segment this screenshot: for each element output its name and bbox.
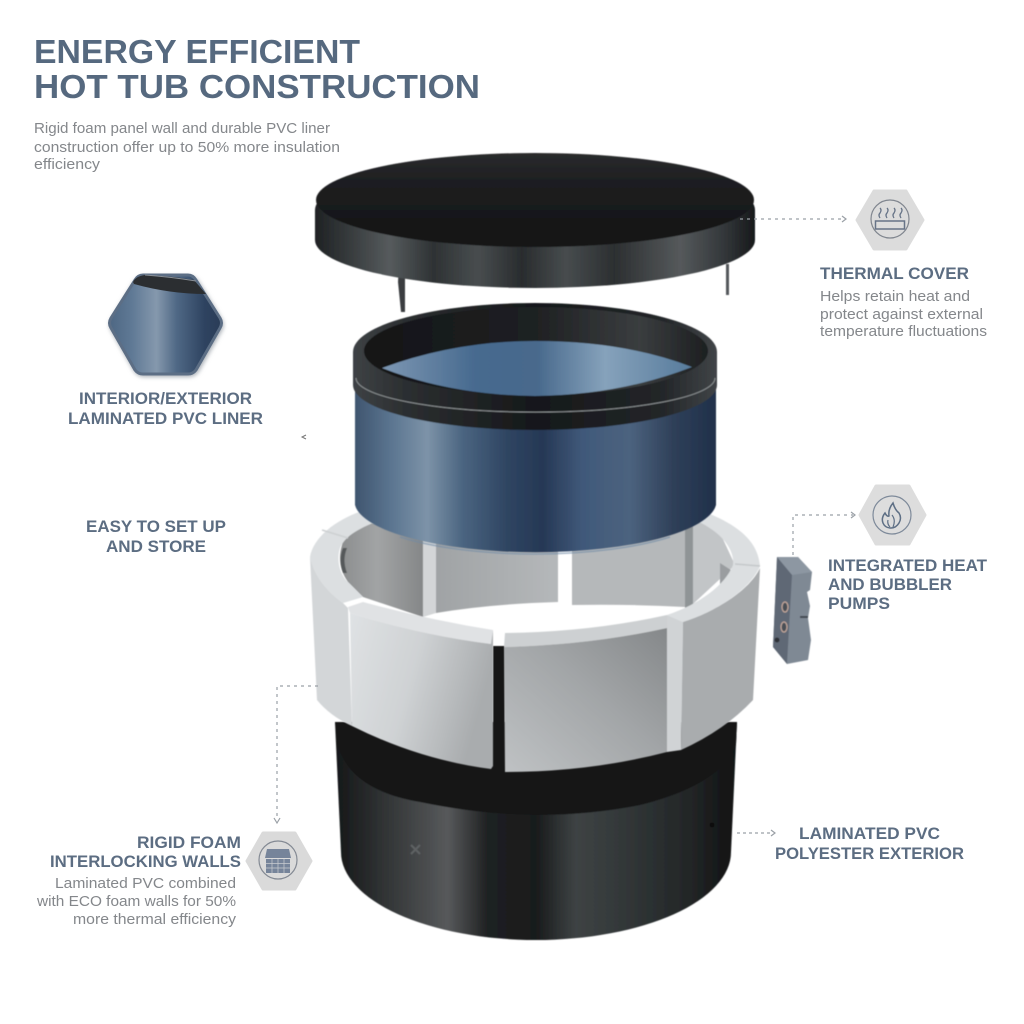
label: integrated heat and bubbler pumps: [828, 556, 988, 613]
label: rigid foam interlocking walls: more thermal efficiency: [73, 912, 237, 928]
label: laminated PVC polyester exterior: LAMINATED PVC: [799, 824, 940, 843]
connector: rigid foam walls: [274, 686, 318, 823]
inner back walls: [340, 515, 735, 617]
label: interior/exterior laminated PVC liner: [68, 389, 263, 428]
laminated PVC liner tub: [353, 303, 717, 554]
label: thermal cover: THERMAL COVER: [820, 264, 969, 283]
icon: foam wall hexagon: [247, 833, 311, 889]
label: integrated heat and bubbler pumps: INTEGRATED HEAT: [828, 556, 988, 575]
intro text: [34, 121, 340, 173]
latch left: [398, 264, 405, 312]
label: thermal cover: protect against external: [820, 307, 983, 323]
latch right: [726, 264, 729, 295]
front-right panel: [504, 615, 667, 772]
tub opening: [364, 307, 708, 395]
blue interior liner: [382, 341, 692, 396]
left side panel: [310, 557, 352, 726]
intro text: efficiency: [34, 157, 101, 173]
title: ENERGY EFFICIENT: [34, 33, 360, 70]
label: thermal cover: temperature fluctuations: [820, 324, 987, 340]
label: integrated heat and bubbler pumps: AND BUBBLER: [828, 575, 952, 594]
label: rigid foam interlocking walls: with ECO foam walls for 50%: [36, 894, 236, 910]
label: rigid foam interlocking walls: INTERLOCKING WALLS: [50, 852, 241, 871]
label: thermal cover: [820, 264, 987, 340]
label: rigid foam interlocking walls: [36, 833, 241, 928]
title: [34, 33, 480, 105]
ring top face: [310, 510, 760, 622]
label: laminated PVC polyester exterior: POLYESTER EXTERIOR: [775, 844, 964, 863]
icon: flame hexagon: [860, 486, 925, 544]
right side panel: [667, 568, 760, 752]
connector: thermal cover: [740, 216, 846, 222]
label: easy to set up and store: [86, 517, 226, 556]
black tub rim: [353, 303, 717, 430]
label: interior/exterior laminated PVC liner: INTERIOR/EXTERIOR: [79, 389, 252, 408]
label: integrated heat and bubbler pumps: PUMPS: [828, 594, 890, 613]
label: rigid foam interlocking walls: RIGID FOAM: [137, 833, 241, 852]
foam ring, rigid interlocking wall panels: [310, 510, 760, 772]
front-left panel: [348, 602, 493, 769]
intro text: construction offer up to 50% more insulation: [34, 140, 340, 156]
icon: liner material hexagon: [110, 275, 222, 374]
connector: polyester exterior: [737, 830, 775, 836]
laminated PVC polyester exterior base: [335, 646, 737, 940]
icon: thermal cover hexagon: [857, 191, 923, 249]
label: interior/exterior laminated PVC liner: LAMINATED PVC LINER: [68, 409, 263, 428]
blue tub body: [355, 385, 716, 552]
label: thermal cover: Helps retain heat and: [820, 289, 970, 305]
label: easy to set up and store: EASY TO SET UP: [86, 517, 226, 536]
label: rigid foam interlocking walls: Laminated PVC combined: [55, 876, 236, 892]
label: laminated PVC polyester exterior: [775, 824, 964, 863]
intro text: Rigid foam panel wall and durable PVC liner: [34, 121, 330, 137]
connector: heat and bubbler pumps: [793, 512, 855, 555]
label: easy to set up and store: AND STORE: [106, 537, 206, 556]
title: HOT TUB CONSTRUCTION: [34, 68, 480, 105]
small arrow mark: [302, 435, 306, 439]
thermal cover lid: [315, 153, 755, 312]
integrated heat and bubbler pump unit: [773, 557, 812, 664]
